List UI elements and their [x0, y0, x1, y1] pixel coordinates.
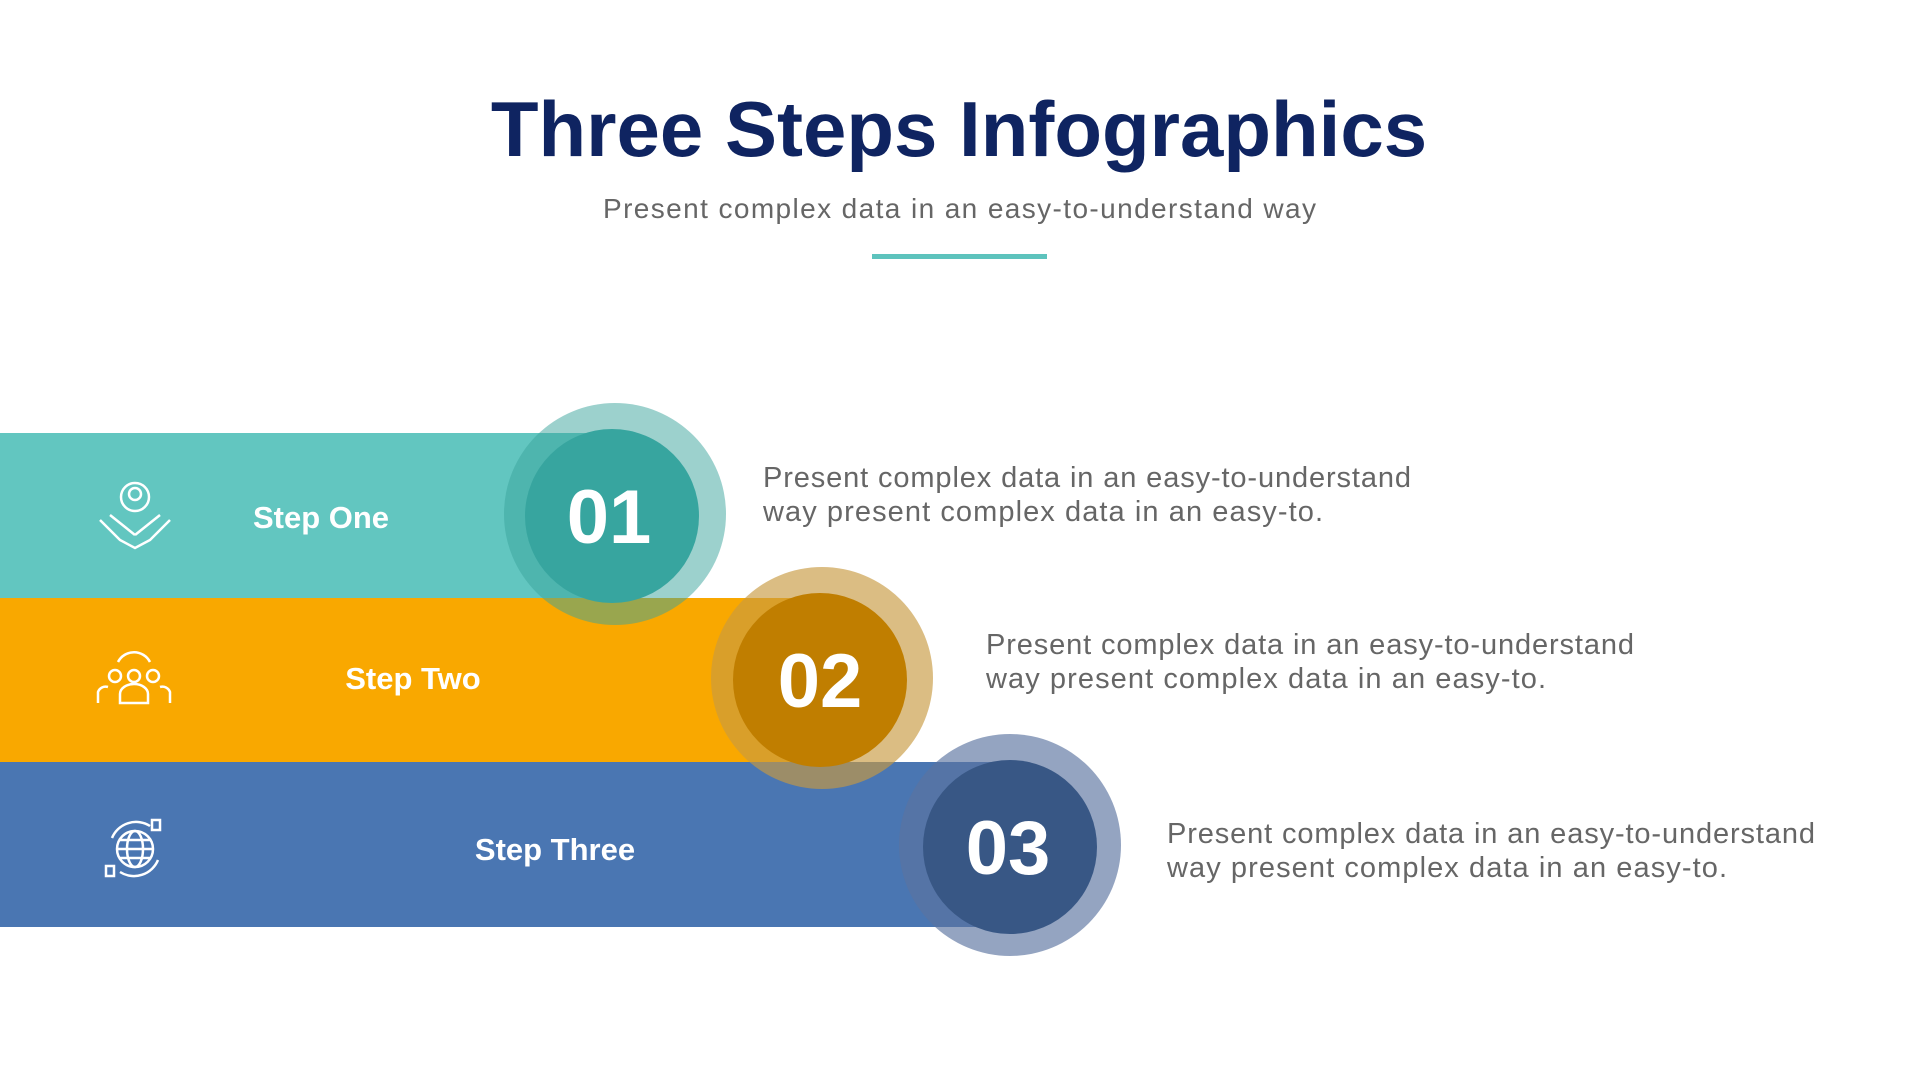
circle 02: 02 [778, 639, 862, 724]
circle 01: 01 [567, 475, 651, 560]
icon: handshake gear [100, 483, 170, 548]
circle 03: 03 [966, 806, 1050, 891]
text: step one description [762, 462, 1411, 528]
band: step three [0, 762, 1010, 927]
text: step two description: way present complex data in an easy-to. [985, 663, 1546, 695]
text: step three description: Present complex data in an easy-to-understand [1167, 818, 1815, 850]
circle 02 [711, 567, 933, 789]
label: step two: Step Two [345, 661, 481, 696]
icon: globe [106, 820, 160, 876]
label: step three: Step Three [475, 832, 635, 867]
circle 01 [504, 403, 726, 625]
band: step two [0, 598, 825, 763]
band: step one [0, 433, 620, 599]
text: step one description: way present complex data in an easy-to. [762, 496, 1323, 528]
text: step two description [985, 629, 1634, 695]
label: step one: Step One [253, 500, 389, 535]
circle 03 [899, 734, 1121, 956]
subtitle: Present complex data in an easy-to-understand way [603, 193, 1316, 224]
text: step two description: Present complex data in an easy-to-understand [986, 629, 1634, 661]
text: step three description [1166, 818, 1815, 884]
icon: group [98, 652, 170, 703]
text: step one description: Present complex data in an easy-to-understand [763, 462, 1411, 494]
title: Three Steps Infographics [491, 85, 1427, 173]
text: step three description: way present complex data in an easy-to. [1166, 852, 1727, 884]
